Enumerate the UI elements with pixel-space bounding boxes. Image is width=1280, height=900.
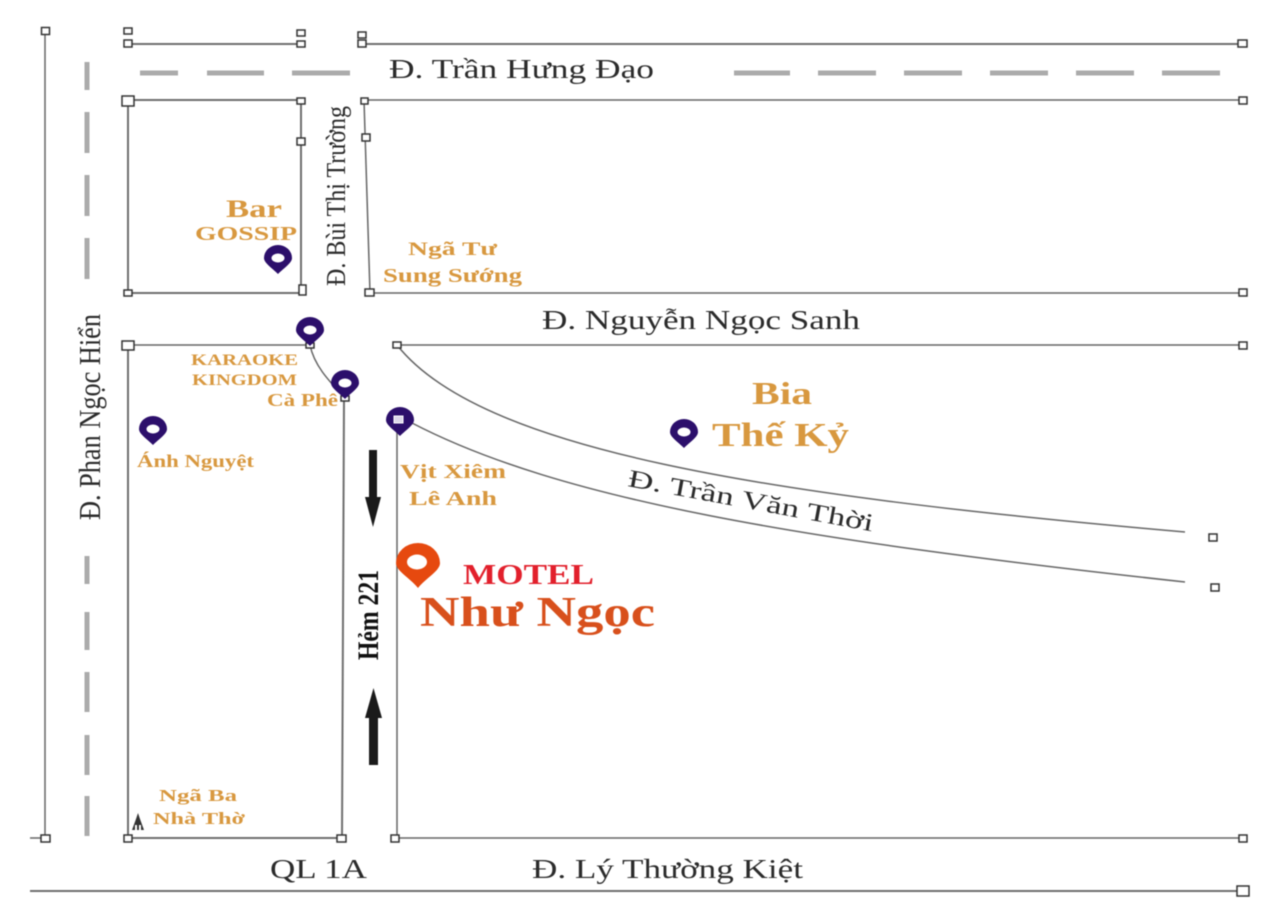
label: Cà Phê: Cà Phê [267,390,338,410]
icon: pin Karaoke [296,317,324,346]
arrow: down [365,450,381,527]
label: Vịt Xiêm Lê Anh [400,461,506,510]
label: Ngã Tư Sung Sướng: Sung Sướng [383,265,522,287]
label: Vịt Xiêm Lê Anh: Lê Anh [409,488,497,510]
label: Karaoke Kingdom: KARAOKE [191,352,298,369]
label: Ngã Ba Nhà Thờ [153,786,246,828]
icon: pin Cà Phê [331,370,359,399]
street name: Bùi Thị Trường: Đ. Bùi Thị Trường [321,106,351,286]
label: Bar Gossip [195,196,297,245]
label: Bia Thế Kỷ [712,375,849,454]
street name: Nguyễn Ngọc Sanh: Đ. Nguyễn Ngọc Sanh [542,305,861,335]
label: Ngã Tư Sung Sướng: Ngã Tư [408,239,498,260]
label: Bia Thế Kỷ: Thế Kỷ [712,417,849,454]
arrow: up [365,688,382,765]
street name: Trần Hưng Đạo: Đ. Trần Hưng Đạo [389,54,654,84]
icon: church [132,813,144,830]
label: Bar Gossip: Bar [226,196,282,223]
label: Ánh Nguyệt: Ánh Nguyệt [137,450,254,471]
street name: Trần Văn Thời: Đ. Trần Văn Thời [626,465,876,537]
title: Motel: MOTEL [463,560,594,591]
title: Như Ngọc: Như Ngọc [420,590,655,636]
icon: motel location pin [396,543,440,588]
icon: pin Bar Gossip [264,245,292,274]
alley name: Hẻm 221: Hẻm 221 [352,570,385,660]
icon: pin Bia Thế Kỷ [670,419,698,448]
label: Ngã Ba Nhà Thờ: Nhà Thờ [153,809,246,828]
dashed road markings [87,62,1220,836]
label: Karaoke Kingdom [191,352,298,389]
label: Bar Gossip: GOSSIP [195,223,297,245]
label: Ngã Tư Sung Sướng [383,239,522,287]
street name: Lý Thường Kiệt: Đ. Lý Thường Kiệt [532,854,804,884]
street name: QL 1A: QL 1A [270,854,368,884]
label: Karaoke Kingdom: KINGDOM [192,372,297,389]
street name: Phan Ngọc Hiển: Đ. Phan Ngọc Hiển [72,314,107,520]
label: Ngã Ba Nhà Thờ: Ngã Ba [159,786,238,805]
icon: pin Vịt Xiêm [386,407,414,436]
label: Bia Thế Kỷ: Bia [752,375,812,411]
label: Vịt Xiêm Lê Anh: Vịt Xiêm [400,461,506,483]
icon: pin Ánh Nguyệt [139,416,167,445]
